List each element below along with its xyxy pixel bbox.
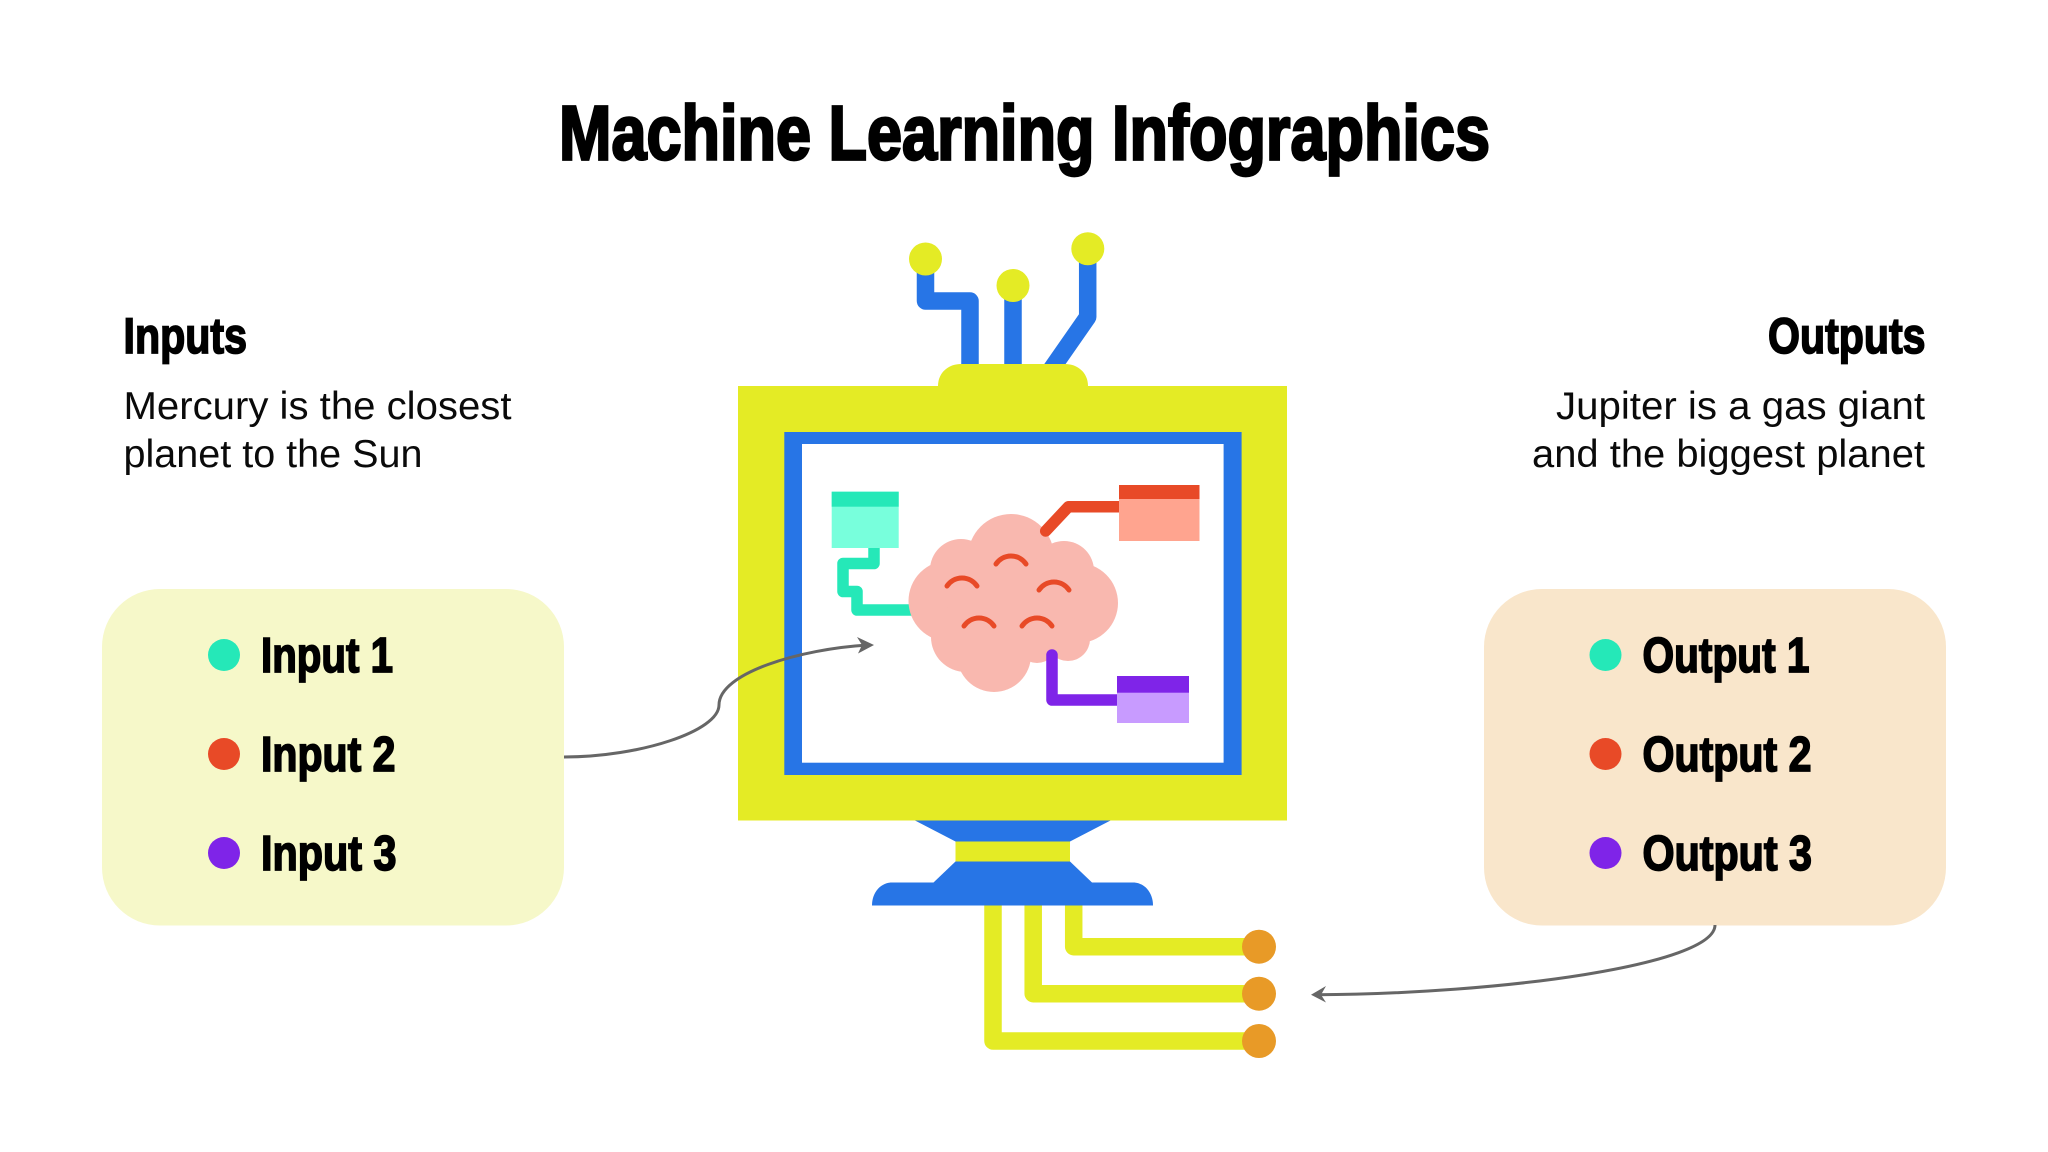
output wires <box>993 900 1259 1041</box>
list item: input 1 <box>208 629 393 683</box>
brain illustration <box>832 485 1200 723</box>
list item: output 3 <box>1590 827 1812 881</box>
purple box <box>1117 676 1189 723</box>
icon: computer monitor <box>738 232 1287 1058</box>
heading: outputs: Outputs <box>1768 308 1926 364</box>
panel: inputs list <box>102 589 564 926</box>
panel: outputs heading and description <box>1532 308 1926 476</box>
text block: inputs description <box>124 385 512 476</box>
text block: outputs description <box>1532 385 1925 476</box>
brain fold lines <box>947 556 1069 626</box>
list item: input 1: Input 1 <box>261 629 393 683</box>
monitor stand <box>872 820 1153 906</box>
title: Machine Learning Infographics <box>559 90 1490 176</box>
list item: output 2 <box>1590 728 1812 782</box>
text block: inputs description: Mercury is the closest <box>124 385 512 428</box>
text block: outputs description: Jupiter is a gas giant <box>1556 385 1925 428</box>
arrow: inputs to monitor <box>564 637 874 757</box>
list item: input 3: Input 3 <box>261 827 396 881</box>
teal connector <box>843 545 915 610</box>
teal box <box>832 492 899 548</box>
list item: output 3: Output 3 <box>1642 827 1812 881</box>
list item: input 3 <box>208 827 396 881</box>
list item: input 2: Input 2 <box>261 728 396 782</box>
brain shape <box>908 514 1118 692</box>
list item: output 1: Output 1 <box>1642 629 1810 683</box>
list item: output 1 <box>1590 629 1810 683</box>
panel: inputs heading and description <box>124 308 512 476</box>
antenna wires <box>926 249 1088 374</box>
text block: outputs description: and the biggest planet <box>1532 433 1925 476</box>
text block: inputs description: planet to the Sun <box>124 433 422 476</box>
monitor frame <box>738 364 1287 820</box>
list item: input 2 <box>208 728 396 782</box>
list item: output 2: Output 2 <box>1642 728 1812 782</box>
panel: outputs list <box>1484 589 1946 926</box>
orange connector <box>1046 507 1122 531</box>
arrow: output panel to monitor <box>1311 925 1715 1002</box>
purple connector <box>1052 655 1120 700</box>
antenna tips <box>909 232 1104 302</box>
heading: inputs: Inputs <box>124 308 247 364</box>
output wire tips <box>1242 930 1276 1058</box>
orange box <box>1119 485 1200 541</box>
